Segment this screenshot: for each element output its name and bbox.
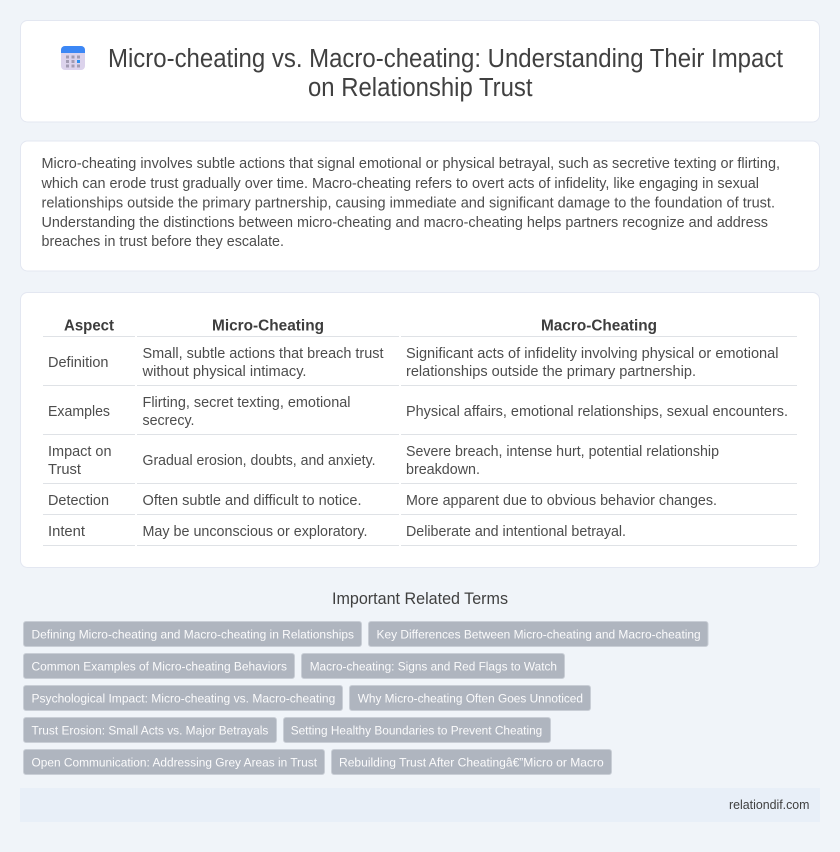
tag xyxy=(24,718,276,742)
row: intent: May be unconscious or exploratory. xyxy=(142,524,368,540)
tag: Psychological Impact: Micro-cheating vs. Macro-cheating xyxy=(32,691,335,705)
tag xyxy=(24,654,294,678)
tag: Common Examples of Micro-cheating Behaviors xyxy=(32,659,287,673)
title xyxy=(108,45,783,102)
panel: header xyxy=(20,20,820,122)
tag xyxy=(302,654,564,678)
table header: Aspect xyxy=(64,318,114,334)
row: impact on trust: breakdown. xyxy=(406,462,480,478)
row: examples: secrecy. xyxy=(142,413,194,429)
tag: Defining Micro-cheating and Macro-cheating in Relationships xyxy=(32,627,354,641)
row: intent: Deliberate and intentional betrayal. xyxy=(406,524,626,540)
row: detection: More apparent due to obvious behavior changes. xyxy=(406,493,717,509)
row: impact on trust: Gradual erosion, doubts, and anxiety. xyxy=(142,453,376,469)
row: intent xyxy=(48,524,626,540)
row: impact on trust: Severe breach, intense hurt, potential relationship xyxy=(406,444,719,460)
tag xyxy=(24,750,324,774)
row: detection: Often subtle and difficult to notice. xyxy=(142,493,362,509)
row: definition: without physical intimacy. xyxy=(141,364,306,380)
tag: Why Micro-cheating Often Goes Unnoticed xyxy=(358,691,583,705)
row: definition: Significant acts of infidelity involving physical or emotional xyxy=(406,346,778,362)
tag xyxy=(284,718,550,742)
row: examples: Physical affairs, emotional relationships, sexual encounters. xyxy=(406,404,788,420)
tag: Rebuilding Trust After Cheatingâ€”Micro or Macro xyxy=(339,755,604,769)
tag: Setting Healthy Boundaries to Prevent Cheating xyxy=(291,723,542,737)
text block: summary xyxy=(41,156,780,250)
row: detection xyxy=(48,493,717,509)
related term tags xyxy=(24,622,708,774)
icon: calendar xyxy=(61,46,85,70)
row: definition: relationships outside the primary partnership. xyxy=(406,364,696,380)
tag xyxy=(332,750,612,774)
footer xyxy=(20,788,820,822)
text block: summary: which can erode trust gradually over time. Macro-cheating refers to overt acts of infidelity, like engaging in sexual xyxy=(41,176,759,192)
table header: Macro-Cheating xyxy=(541,318,657,334)
tag xyxy=(368,622,708,646)
tag xyxy=(350,686,590,710)
row: examples: Flirting, secret texting, emotional xyxy=(142,395,350,411)
tag xyxy=(24,686,342,710)
footer: relationdif.com xyxy=(729,797,810,812)
title: on Relationship Trust xyxy=(308,74,532,102)
row: intent: Intent xyxy=(48,524,85,540)
text block: summary: Understanding the distinctions between micro-cheating and macro-cheating helps partners recognize and address xyxy=(42,215,768,231)
tag: Trust Erosion: Small Acts vs. Major Betrayals xyxy=(32,723,268,737)
table header: Micro-Cheating xyxy=(212,318,324,334)
table header xyxy=(64,318,657,334)
row: examples: Examples xyxy=(48,404,110,420)
panel: comparison table xyxy=(20,292,820,568)
tag: Macro-cheating: Signs and Red Flags to Watch xyxy=(310,659,557,673)
title: Micro-cheating vs. Macro-cheating: Understanding Their Impact xyxy=(108,45,783,73)
row: impact on trust: Impact on xyxy=(48,444,112,460)
row: examples xyxy=(48,395,788,429)
text block: summary: breaches in trust before they escalate. xyxy=(42,234,284,250)
row: definition: Definition xyxy=(48,355,109,371)
heading: important related terms: Important Related Terms xyxy=(332,590,508,608)
panel: summary paragraph xyxy=(20,141,820,271)
row: definition xyxy=(48,346,778,380)
row: impact on trust xyxy=(48,444,719,478)
row: detection: Detection xyxy=(48,493,109,509)
row: impact on trust: Trust xyxy=(48,462,81,478)
tag xyxy=(24,622,362,646)
text block: summary: Micro-cheating involves subtle actions that signal emotional or physical betrayal, such as secretive texting or flirting, xyxy=(42,156,780,172)
text block: summary: relationships outside the primary partnership, causing immediate and significant damage to the foundation of trust. xyxy=(42,196,775,212)
tag: Key Differences Between Micro-cheating and Macro-cheating xyxy=(376,627,701,641)
row: definition: Small, subtle actions that breach trust xyxy=(142,346,384,362)
tag: Open Communication: Addressing Grey Areas in Trust xyxy=(32,755,318,769)
